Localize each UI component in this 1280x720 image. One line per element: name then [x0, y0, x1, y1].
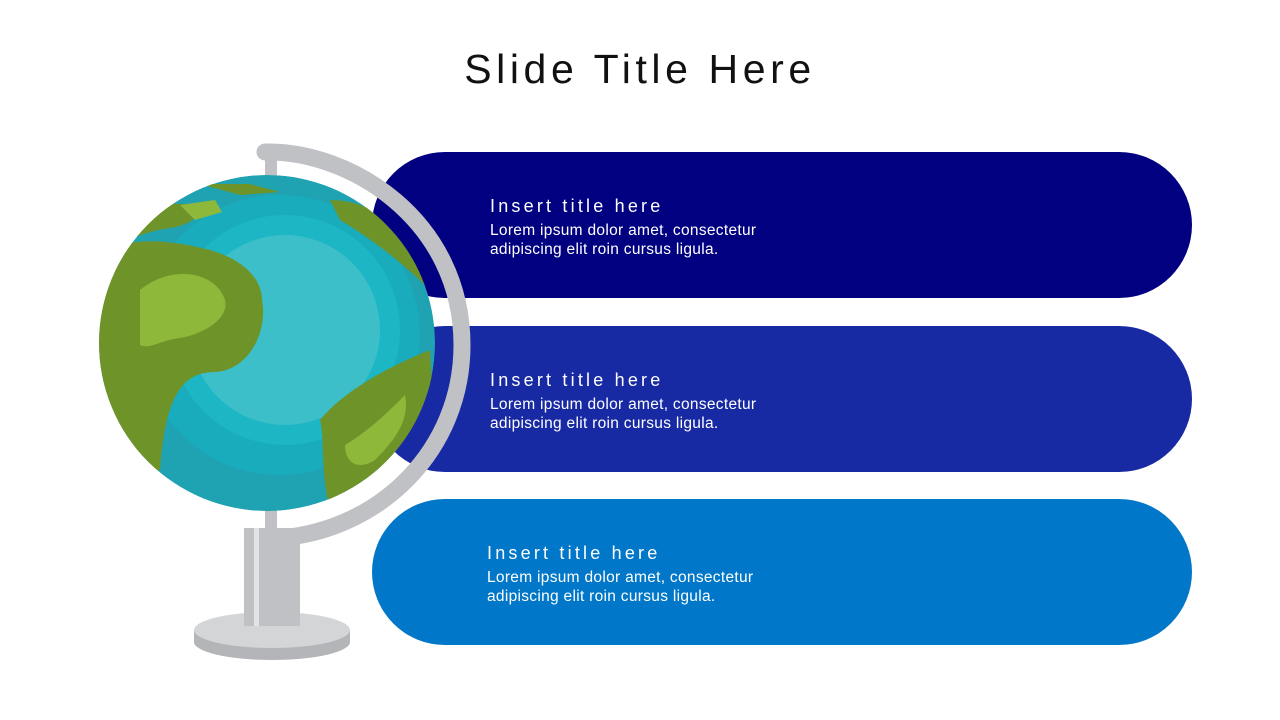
- panel: item 3: adipiscing elit roin cursus ligula.: [487, 588, 715, 605]
- panel: item 2: Insert title here: [490, 370, 663, 390]
- panel: item 1: adipiscing elit roin cursus ligula.: [490, 241, 718, 258]
- panel: item 1: [372, 152, 1192, 298]
- panel: item 2: Lorem ipsum dolor amet, consectetur: [490, 396, 756, 413]
- panel: item 2: [372, 326, 1192, 472]
- panel: item 2: adipiscing elit roin cursus ligula.: [490, 415, 718, 432]
- title: Slide Title Here: [464, 46, 816, 92]
- panel: item 3: Lorem ipsum dolor amet, consectetur: [487, 569, 753, 586]
- icon: globe: [99, 144, 470, 660]
- panel: item 3: Insert title here: [487, 543, 660, 563]
- panel: item 1: Insert title here: [490, 196, 663, 216]
- panel: item 1: Lorem ipsum dolor amet, consectetur: [490, 222, 756, 239]
- panel: item 3: [372, 499, 1192, 645]
